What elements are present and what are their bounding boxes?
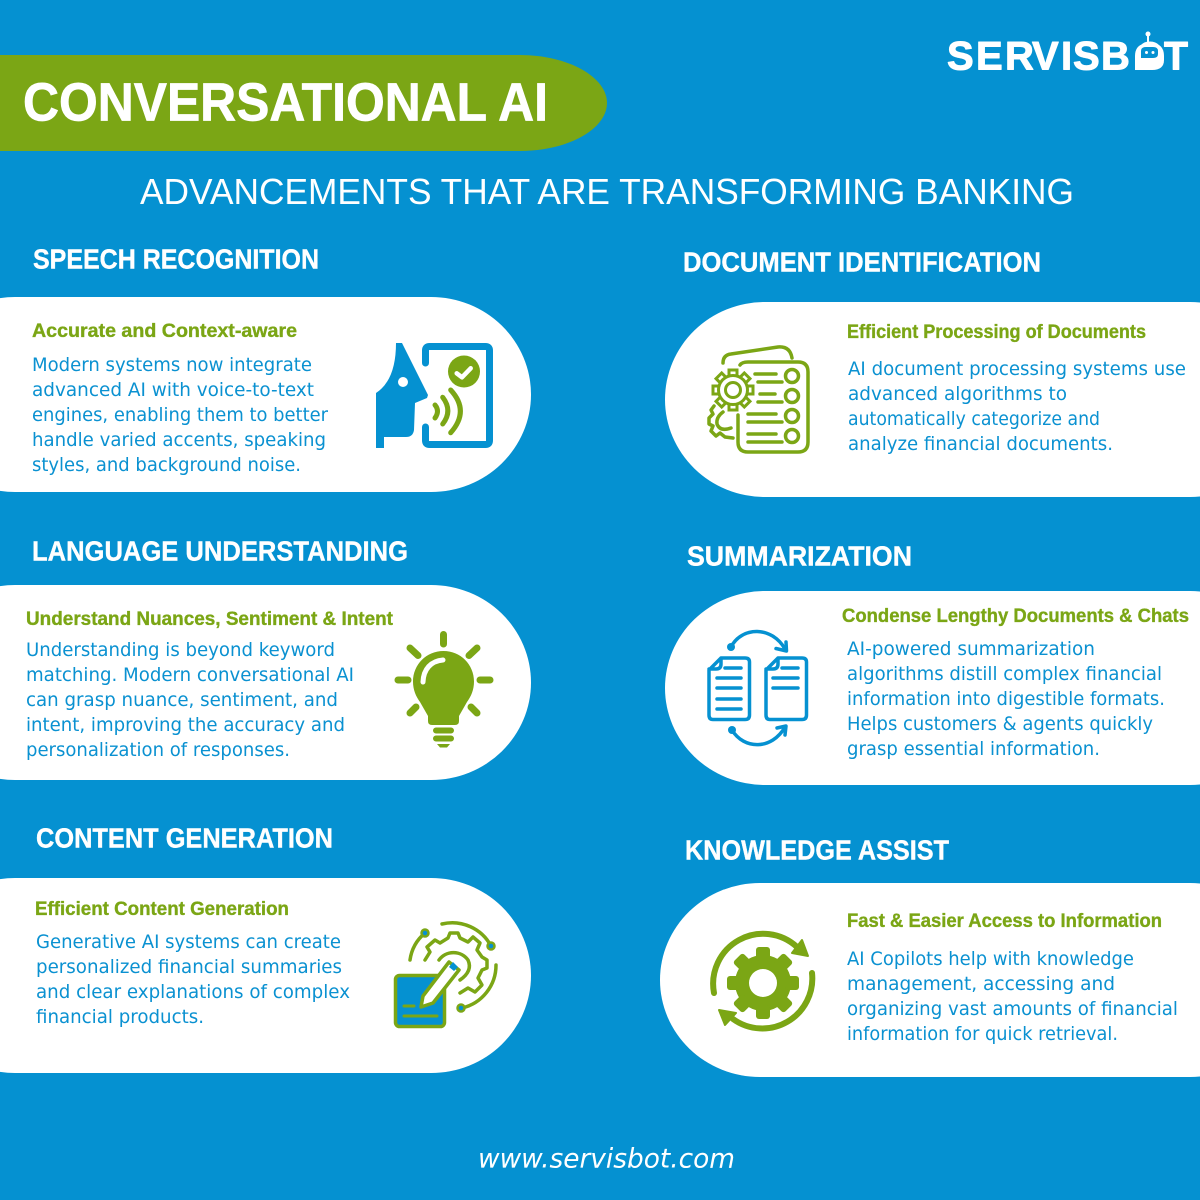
panel: content generation [0, 878, 531, 1073]
text block: content generation: financial products. [36, 1006, 204, 1028]
text block: summarization: Helps customers & agents quickly [847, 713, 1153, 735]
icon: light bulb [398, 634, 490, 748]
heading: speech recognition: SPEECH RECOGNITION [33, 244, 319, 274]
panel: summarization [665, 591, 1200, 785]
panel: knowledge assist [660, 883, 1200, 1077]
text block: document identification [848, 358, 1186, 455]
text block: summarization: grasp essential information. [847, 738, 1100, 760]
panel: language understanding [0, 585, 531, 780]
heading: summarization: SUMMARIZATION [687, 540, 912, 572]
heading: content generation: CONTENT GENERATION [36, 822, 333, 854]
logo: Servisbot: T [1164, 34, 1188, 78]
text block: document identification: advanced algorithms to [848, 383, 1067, 405]
subheading: efficient processing: Efficient Processing of Documents [847, 322, 1146, 343]
text block: content generation: Generative AI systems can create [36, 931, 341, 953]
title banner: CONVERSATIONAL AI [23, 72, 548, 132]
heading: language understanding: LANGUAGE UNDERSTANDING [32, 536, 408, 566]
text block: content generation: and clear explanations of complex [36, 981, 350, 1003]
text block: knowledge assist [847, 948, 1178, 1045]
text block: document identification: automatically categorize and [848, 408, 1100, 430]
logo: Servisbot: SERVISB [947, 34, 1130, 78]
icon: gear with cycle arrows [713, 934, 812, 1028]
text block: document identification: AI document processing systems use [848, 358, 1186, 380]
subheading: efficient content generation: Efficient Content Generation [35, 899, 289, 920]
subheading: fast and easier access: Fast & Easier Access to Information [847, 911, 1162, 932]
text block: speech recognition: handle varied accents, speaking [32, 429, 326, 451]
heading: knowledge assist: KNOWLEDGE ASSIST [685, 834, 949, 866]
text block: knowledge assist: information for quick retrieval. [847, 1023, 1118, 1045]
text block: summarization: AI-powered summarization [847, 638, 1095, 660]
text block: speech recognition: advanced AI with voice-to-text [32, 379, 314, 401]
panel: speech recognition [0, 297, 531, 492]
text block: language understanding: can grasp nuance, sentiment, and [26, 689, 338, 711]
text block: content generation: personalized financial summaries [36, 956, 342, 978]
text block: summarization: algorithms distill complex financial [847, 663, 1162, 685]
icon: documents exchange [709, 631, 806, 745]
text block: language understanding [26, 639, 354, 761]
subheading: accurate and context-aware: Accurate and Context-aware [32, 321, 297, 342]
icon: speaking head with check [376, 343, 490, 448]
text block: speech recognition [32, 354, 328, 476]
text block: speech recognition: engines, enabling them to better [32, 404, 328, 426]
logo: Servisbot: O [1136, 34, 1164, 78]
text block: summarization: information into digestible formats. [847, 688, 1165, 710]
text block: knowledge assist: AI Copilots help with knowledge [847, 948, 1134, 970]
text block: speech recognition: styles, and background noise. [32, 454, 301, 476]
footer url: www.servisbot.com [478, 1144, 735, 1174]
title banner [0, 55, 607, 151]
text block: language understanding: personalization of responses. [26, 739, 290, 761]
subheading: condense lengthy documents: Condense Lengthy Documents & Chats [842, 606, 1189, 627]
text block: knowledge assist: management, accessing and [847, 973, 1115, 995]
text block: speech recognition: Modern systems now integrate [32, 354, 312, 376]
text block: content generation [36, 931, 350, 1028]
text block: language understanding: matching. Modern conversational AI [26, 664, 354, 686]
subheading: understand nuances: Understand Nuances, Sentiment & Intent [26, 609, 394, 630]
subtitle: ADVANCEMENTS THAT ARE TRANSFORMING BANKING [140, 171, 1074, 212]
panel: document identification [665, 302, 1200, 497]
heading: document identification: DOCUMENT IDENTIFICATION [683, 246, 1041, 278]
text block: language understanding: intent, improving the accuracy and [26, 714, 345, 736]
icon: documents with gears [709, 347, 808, 452]
text block: language understanding: Understanding is beyond keyword [26, 639, 335, 661]
text block: document identification: analyze financial documents. [848, 433, 1113, 455]
text block: summarization [847, 638, 1165, 760]
text block: knowledge assist: organizing vast amounts of financial [847, 998, 1178, 1020]
icon: pencil and gear [396, 923, 496, 1026]
